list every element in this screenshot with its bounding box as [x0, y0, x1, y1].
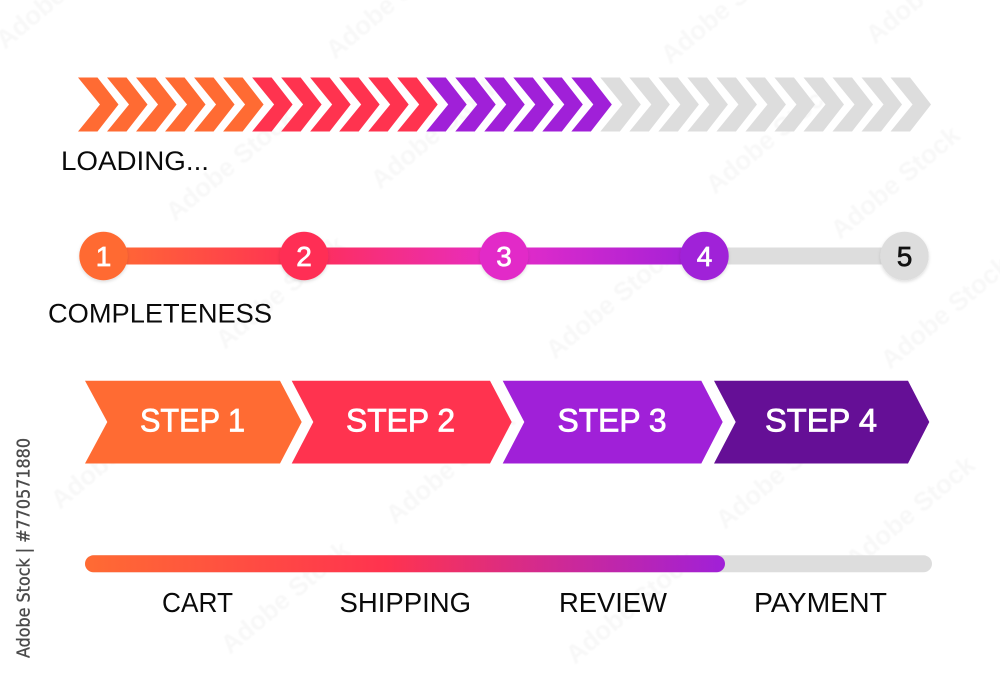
gradient progress line: [103, 248, 704, 264]
step node 1: [79, 232, 128, 280]
step 3 arrow: STEP 3: [558, 402, 666, 438]
step node 3: 3: [496, 241, 512, 272]
red chevrons: [252, 78, 438, 132]
grey remaining track: [704, 248, 904, 264]
purple chevrons: [426, 78, 612, 132]
step 2 arrow: STEP 2: [346, 402, 455, 438]
loading label: LOADING...: [61, 146, 209, 176]
faint stock watermarks: Adobe Stock: [45, 389, 186, 515]
faint stock watermarks: Adobe Stock: [380, 404, 521, 530]
faint stock watermarks: Adobe Stock: [215, 534, 356, 660]
step node 4: 4: [697, 241, 712, 272]
orange chevrons: [78, 78, 264, 132]
step node 5: 5: [897, 241, 912, 272]
faint stock watermarks: Adobe Stock: [700, 74, 841, 200]
grey track: [85, 555, 932, 572]
stock id side text: Adobe Stock | #770571880: [14, 438, 34, 658]
step arrows: [85, 381, 929, 464]
checkout stage labels: [162, 587, 887, 618]
faint stock watermarks: Adobe Stock: [710, 409, 851, 535]
checkout stage labels: CART: [162, 587, 233, 618]
faint stock watermarks: Adobe Stock: [560, 544, 701, 670]
step 1 arrow: STEP 1: [140, 402, 245, 438]
checkout stage labels: SHIPPING: [340, 587, 471, 618]
step 2 arrow: [292, 381, 512, 464]
faint stock watermarks: Adobe Stock: [160, 101, 301, 227]
completeness label: COMPLETENESS: [48, 298, 272, 328]
faint stock watermarks: Adobe Stock: [825, 119, 966, 245]
step 3 arrow: [503, 381, 723, 464]
checkout progress bar: [85, 555, 932, 572]
gradient fill: [85, 555, 725, 572]
faint stock watermarks: Adobe Stock: [840, 449, 981, 575]
step node 3: [480, 232, 528, 280]
faint stock watermarks: Adobe Stock: [210, 229, 351, 355]
chevron loading bar: [78, 78, 931, 132]
step node 1: 1: [96, 241, 111, 272]
step 4 arrow: [714, 381, 929, 464]
step node 2: 2: [296, 241, 312, 272]
faint stock watermarks: Adobe Stock: [365, 69, 506, 195]
grey chevrons: [600, 78, 931, 132]
checkout stage labels: REVIEW: [559, 587, 668, 618]
checkout stage labels: PAYMENT: [754, 587, 887, 618]
step 4 arrow: STEP 4: [765, 402, 877, 438]
step node 4: [680, 232, 729, 280]
step node 2: [280, 232, 328, 280]
faint stock watermarks: Adobe Stock: [540, 239, 681, 365]
completeness stepper: [79, 232, 929, 280]
step node 5: [880, 232, 929, 280]
step 1 arrow: [85, 381, 302, 464]
